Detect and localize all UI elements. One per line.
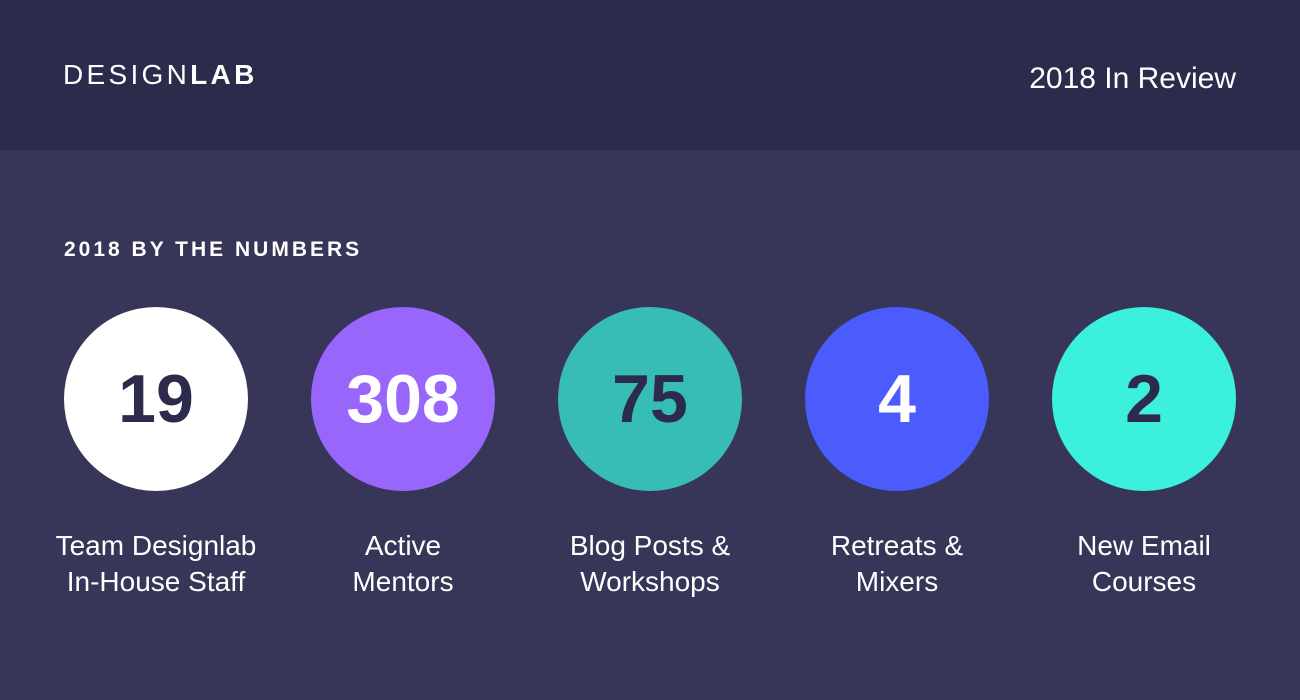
stat: staff: 19 — [118, 361, 194, 437]
header title: 2018 In Review — [1029, 62, 1236, 95]
stat: email courses: New Email — [1077, 530, 1211, 561]
stat: blog posts — [558, 307, 742, 597]
stat: email courses: Courses — [1092, 566, 1196, 597]
stat: mentors — [311, 307, 495, 597]
logo: DESIGNLAB — [63, 59, 258, 90]
header bar — [0, 0, 1300, 150]
stat: retreats: Retreats & — [831, 530, 963, 561]
stat: retreats: 4 — [878, 361, 916, 437]
stat: blog posts: Workshops — [580, 566, 720, 597]
section heading: 2018 BY THE NUMBERS — [64, 238, 362, 261]
stat: mentors: Mentors — [352, 566, 454, 597]
stat: mentors: 308 — [346, 361, 460, 437]
stat: staff: Team Designlab — [56, 530, 256, 561]
stat: retreats — [805, 307, 989, 597]
stat: mentors: Active — [365, 530, 441, 561]
stat: retreats: Mixers — [856, 566, 938, 597]
stat: staff — [56, 307, 256, 597]
stat: email courses: 2 — [1125, 361, 1163, 437]
stat: blog posts: Blog Posts & — [570, 530, 730, 561]
stat: email courses — [1052, 307, 1236, 597]
stat: staff: In-House Staff — [67, 566, 245, 597]
stat: blog posts: 75 — [612, 361, 688, 437]
